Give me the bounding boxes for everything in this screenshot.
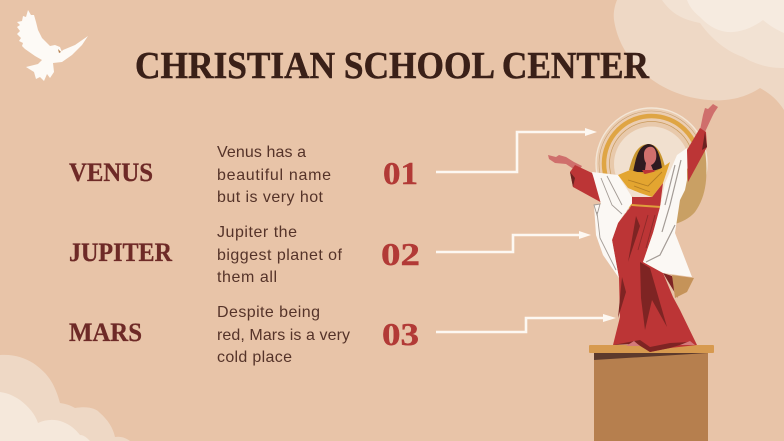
yellow scarf	[618, 162, 670, 197]
title: CHRISTIAN SCHOOL CENTER	[135, 45, 650, 87]
lower red robe	[612, 205, 697, 352]
golden back drape	[675, 150, 706, 224]
illustration: pedestal	[589, 345, 714, 441]
left white drape	[592, 172, 632, 278]
text: Jupiter description: biggest planet of	[217, 247, 343, 264]
text: Mars description: red, Mars is a very	[217, 327, 350, 344]
arrow 1	[436, 128, 597, 172]
text: Jupiter description: Jupiter the	[217, 224, 297, 241]
face and neck	[644, 147, 656, 170]
clouds: top right	[614, 0, 784, 110]
arrow 2	[436, 231, 591, 252]
text: Venus description: beautiful name	[217, 167, 331, 184]
text: Venus description	[217, 144, 331, 206]
belt	[632, 204, 661, 208]
text: Venus description: but is very hot	[217, 189, 324, 206]
illustration: woman figure with halo	[548, 104, 718, 352]
neckline	[642, 170, 655, 175]
left sleeve	[570, 165, 604, 204]
text: Mars description	[217, 304, 350, 366]
heading: Jupiter: JUPITER	[69, 238, 172, 267]
number 02: 02	[381, 236, 420, 272]
hair	[633, 144, 662, 172]
text: Jupiter description: them all	[217, 269, 277, 286]
upper red bodice	[632, 183, 663, 207]
halo	[596, 108, 707, 219]
raised right arm and hand	[700, 104, 718, 132]
right sleeve	[687, 128, 707, 182]
number 01: 01	[383, 155, 418, 191]
left arm and hand	[548, 155, 582, 172]
heading: Venus: VENUS	[69, 158, 153, 187]
clouds: bottom left	[0, 355, 130, 441]
text: Mars description: cold place	[217, 349, 292, 366]
robe fold shadows	[613, 216, 690, 352]
golden under-drape	[672, 275, 694, 298]
hood	[629, 144, 665, 178]
item 1: Venus	[69, 128, 597, 206]
number 03: 03	[382, 316, 419, 352]
heading: Mars: MARS	[69, 318, 142, 347]
right white drape	[643, 148, 692, 277]
icon: white dove	[17, 10, 88, 81]
arrow 3	[436, 314, 616, 332]
text: Venus description: Venus has a	[217, 144, 306, 161]
text: Mars description: Despite being	[217, 304, 320, 321]
item 2: Jupiter	[69, 224, 591, 286]
feet	[626, 341, 695, 346]
text: Jupiter description	[217, 224, 343, 286]
item 3: Mars	[69, 304, 616, 366]
